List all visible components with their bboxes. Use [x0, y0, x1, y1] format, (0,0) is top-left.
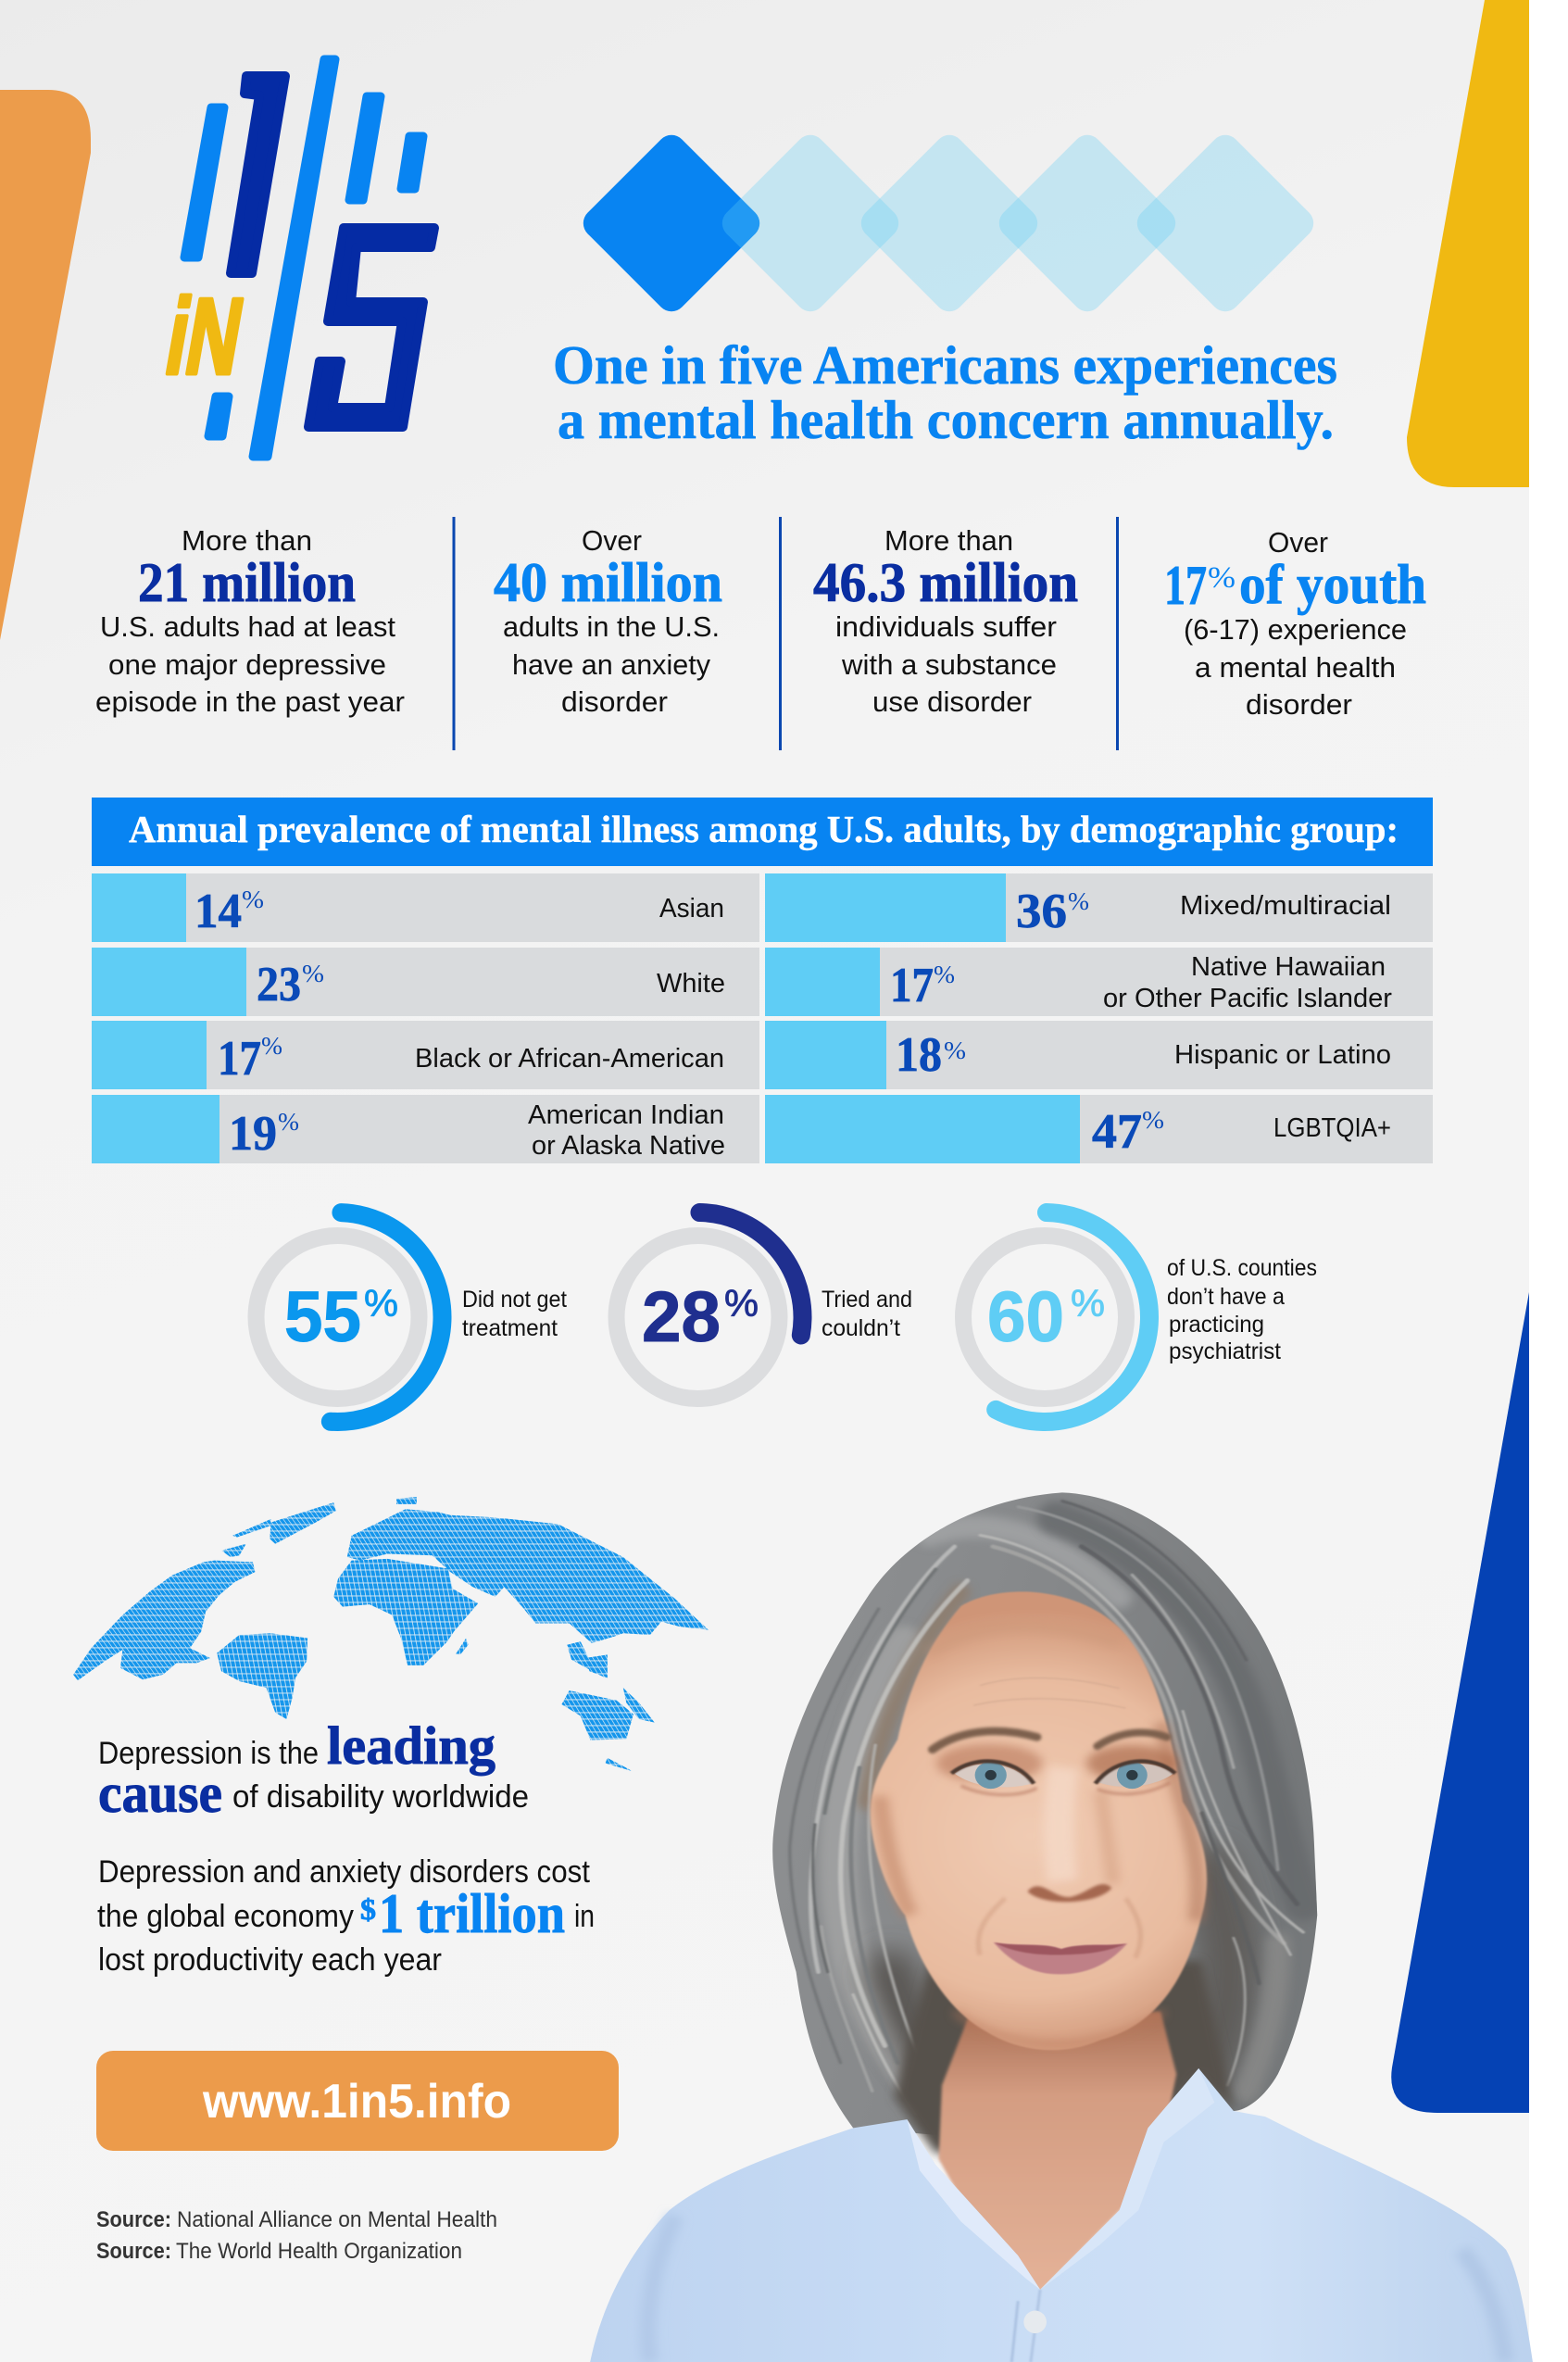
dark hair behind neck — [895, 1961, 1234, 2154]
stat: 46.3 million — [813, 524, 1078, 718]
text block: $1 trillion economic cost — [97, 1854, 595, 1978]
stat: 40 million: disorder — [561, 685, 668, 718]
sources: The World Health Organization — [176, 2239, 462, 2264]
stat: 17% of youth: of youth — [1239, 554, 1426, 615]
neck — [939, 2012, 1176, 2293]
bar: American Indian or Alaska Native 19% — [92, 1095, 759, 1163]
text block: leading cause of disability: leading — [327, 1715, 495, 1776]
stat: 46.3 million: use disorder — [872, 685, 1032, 718]
bar: Mixed/multiracial 36%: Mixed/multiracial — [1180, 891, 1391, 921]
gauge: 60% of counties without a psychiatrist: psychiatrist — [1169, 1338, 1281, 1364]
gauge: 55% did not get treatment — [230, 1209, 567, 1426]
bar: Black or African-American 17%: 17 — [218, 1032, 261, 1086]
bar: American Indian or Alaska Native 19%: % — [278, 1108, 299, 1136]
stat: 46.3 million: 46.3 million — [813, 552, 1078, 613]
stat: 46.3 million: More than — [884, 524, 1013, 557]
smile lines — [978, 1898, 1141, 1958]
gauge: 28% tried and couldn't: 28 — [642, 1277, 721, 1357]
table heading — [92, 798, 1433, 866]
bar: Native Hawaiian or Other Pacific Islander 17%: or Other Pacific Islander — [1103, 984, 1392, 1013]
stat: 21 million: one major depressive — [108, 648, 386, 681]
bar: White 23% — [92, 948, 759, 1016]
bar: Black or African-American 17%: Black or African-American — [415, 1044, 724, 1074]
bar: Native Hawaiian or Other Pacific Islander 17%: 17 — [890, 959, 934, 1012]
text block: leading cause of disability — [98, 1715, 529, 1824]
gauge: 60% of counties without a psychiatrist: 60 — [987, 1277, 1064, 1357]
text block: $1 trillion economic cost: lost productivity each year — [98, 1942, 442, 1978]
bar: Black or African-American 17% — [92, 1021, 759, 1089]
stat: 17% of youth: % — [1208, 561, 1236, 595]
bar: LGBTQIA+ 47% — [765, 1095, 1433, 1163]
bar: Black or African-American 17%: % — [261, 1032, 282, 1060]
bar: Asian 14%: 14 — [194, 885, 242, 938]
stat: 17% of youth: 17 — [1164, 555, 1207, 616]
stat: 17% of youth: a mental health — [1195, 651, 1396, 684]
dotted world map — [73, 1497, 709, 1771]
bar: LGBTQIA+ 47%: LGBTQIA+ — [1273, 1113, 1391, 1143]
text block: leading cause of disability: of disability worldwide — [232, 1779, 529, 1815]
panel: prevalence by demographic group — [92, 798, 1433, 1163]
bar: Hispanic or Latino 18%: 18 — [896, 1028, 942, 1082]
stat: 40 million: have an anxiety — [512, 648, 710, 681]
gauge: 60% of counties without a psychiatrist: of U.S. counties — [1167, 1255, 1317, 1281]
text block: $1 trillion economic cost: in — [574, 1899, 595, 1934]
gauge: 28% tried and couldn't: couldn’t — [822, 1315, 900, 1341]
lips — [994, 1942, 1127, 1974]
bar: Mixed/multiracial 36%: % — [1068, 887, 1089, 915]
forehead lines — [973, 1677, 1126, 1708]
gauge: 28% tried and couldn't — [592, 1211, 912, 1424]
gauge: 55% did not get treatment: Did not get — [462, 1287, 567, 1313]
bar: Asian 14% — [92, 873, 759, 942]
gauge: 60% of counties without a psychiatrist — [938, 1211, 1317, 1424]
stat: 40 million: 40 million — [494, 552, 722, 613]
gauge: 55% did not get treatment: % — [364, 1282, 398, 1325]
sources: Source: — [96, 2239, 171, 2264]
bar: LGBTQIA+ 47%: % — [1142, 1106, 1164, 1134]
bar: Native Hawaiian or Other Pacific Islander 17%: Native Hawaiian — [1191, 952, 1386, 982]
gauge: 55% did not get treatment: 55 — [284, 1277, 361, 1357]
stat: 17% of youth: Over — [1268, 526, 1328, 559]
bar: White 23%: % — [302, 960, 324, 987]
stat: 17% of youth: (6-17) experience — [1184, 613, 1407, 646]
eyebrows — [933, 1731, 1037, 1750]
bar: Asian 14%: Asian — [659, 894, 724, 923]
face — [871, 1591, 1207, 2050]
nose — [1059, 1767, 1063, 1881]
headline: One in five Americans experiences — [553, 334, 1337, 396]
stat: 46.3 million: with a substance — [841, 648, 1057, 681]
headline: a mental health concern annually. — [558, 389, 1334, 450]
icon row: five diamonds, one highlighted — [577, 129, 1320, 318]
stat: 40 million: Over — [582, 524, 642, 557]
gauge: 60% of counties without a psychiatrist: practicing — [1169, 1312, 1264, 1338]
decorative shape: orange slanted tab — [0, 90, 91, 640]
table heading: Annual prevalence of mental illness among U.S. adults, by demographic group: — [129, 808, 1399, 850]
stat: 21 million: episode in the past year — [95, 685, 405, 718]
decorative shape: blue slanted tab — [1391, 1292, 1529, 2113]
gauge: 28% tried and couldn't: % — [724, 1282, 759, 1325]
bar: Mixed/multiracial 36% — [765, 873, 1433, 942]
bar: White 23%: White — [657, 969, 725, 999]
bar: Hispanic or Latino 18%: % — [944, 1037, 966, 1064]
bar: Native Hawaiian or Other Pacific Islander 17%: % — [934, 961, 955, 988]
text block: $1 trillion economic cost: the global economy — [97, 1899, 354, 1934]
bar: Native Hawaiian or Other Pacific Islander 17% — [765, 948, 1433, 1016]
decorative shape: yellow slanted tab — [1407, 0, 1529, 487]
bar: Asian 14%: % — [242, 886, 264, 913]
bar: White 23%: 23 — [257, 958, 301, 1011]
text block: leading cause of disability: cause — [98, 1763, 222, 1824]
stat: 40 million — [494, 524, 722, 718]
bar: Mixed/multiracial 36%: 36 — [1016, 885, 1067, 938]
text block: $1 trillion economic cost: 1 trillion — [379, 1883, 565, 1944]
bar: American Indian or Alaska Native 19%: 19 — [229, 1107, 277, 1161]
gauge: 55% did not get treatment: treatment — [462, 1315, 558, 1341]
bar: American Indian or Alaska Native 19%: American Indian — [528, 1100, 724, 1130]
gauge: 28% tried and couldn't: Tried and — [822, 1287, 912, 1313]
bar: Hispanic or Latino 18%: Hispanic or Latino — [1174, 1040, 1391, 1070]
stat: 21 million: More than — [182, 524, 312, 557]
gauge: 60% of counties without a psychiatrist: % — [1071, 1282, 1105, 1325]
sources: National Alliance on Mental Health — [177, 2207, 497, 2232]
logo: 1 in 5: iN — [158, 276, 252, 396]
stat: 21 million: U.S. adults had at least — [100, 610, 395, 643]
eye sockets — [936, 1744, 1043, 1782]
bar: Hispanic or Latino 18% — [765, 1021, 1433, 1089]
logo: 1 in 5 — [158, 59, 434, 457]
portrait: grey-haired woman in blue shirt — [590, 1492, 1533, 2362]
stat: 21 million: 21 million — [138, 552, 356, 613]
button: website link — [96, 2051, 619, 2151]
button: website link: www.1in5.info — [202, 2075, 511, 2129]
text block: leading cause of disability: Depression is the — [98, 1736, 319, 1771]
gauge: 60% of counties without a psychiatrist: don’t have a — [1167, 1284, 1285, 1310]
chin shadow — [955, 2012, 1164, 2043]
bar: American Indian or Alaska Native 19%: or Alaska Native — [532, 1131, 725, 1161]
stat: 21 million — [95, 524, 405, 718]
stat: 17% of youth — [1164, 526, 1426, 721]
bar: LGBTQIA+ 47%: 47 — [1092, 1105, 1142, 1159]
shirt — [590, 2068, 1533, 2362]
stat: 46.3 million: individuals suffer — [835, 610, 1057, 643]
stat: 40 million: adults in the U.S. — [503, 610, 720, 643]
text block: $1 trillion economic cost: Depression and anxiety disorders cost — [98, 1854, 591, 1890]
text block: $1 trillion economic cost: $ — [360, 1892, 376, 1926]
eyes — [955, 1764, 1032, 1787]
sources — [96, 2207, 497, 2264]
panel: treatment gauges — [230, 1209, 1317, 1426]
stat: 17% of youth: disorder — [1246, 688, 1352, 721]
sources: Source: — [96, 2207, 171, 2232]
panel: key statistics — [95, 517, 1426, 750]
headline — [553, 334, 1337, 450]
